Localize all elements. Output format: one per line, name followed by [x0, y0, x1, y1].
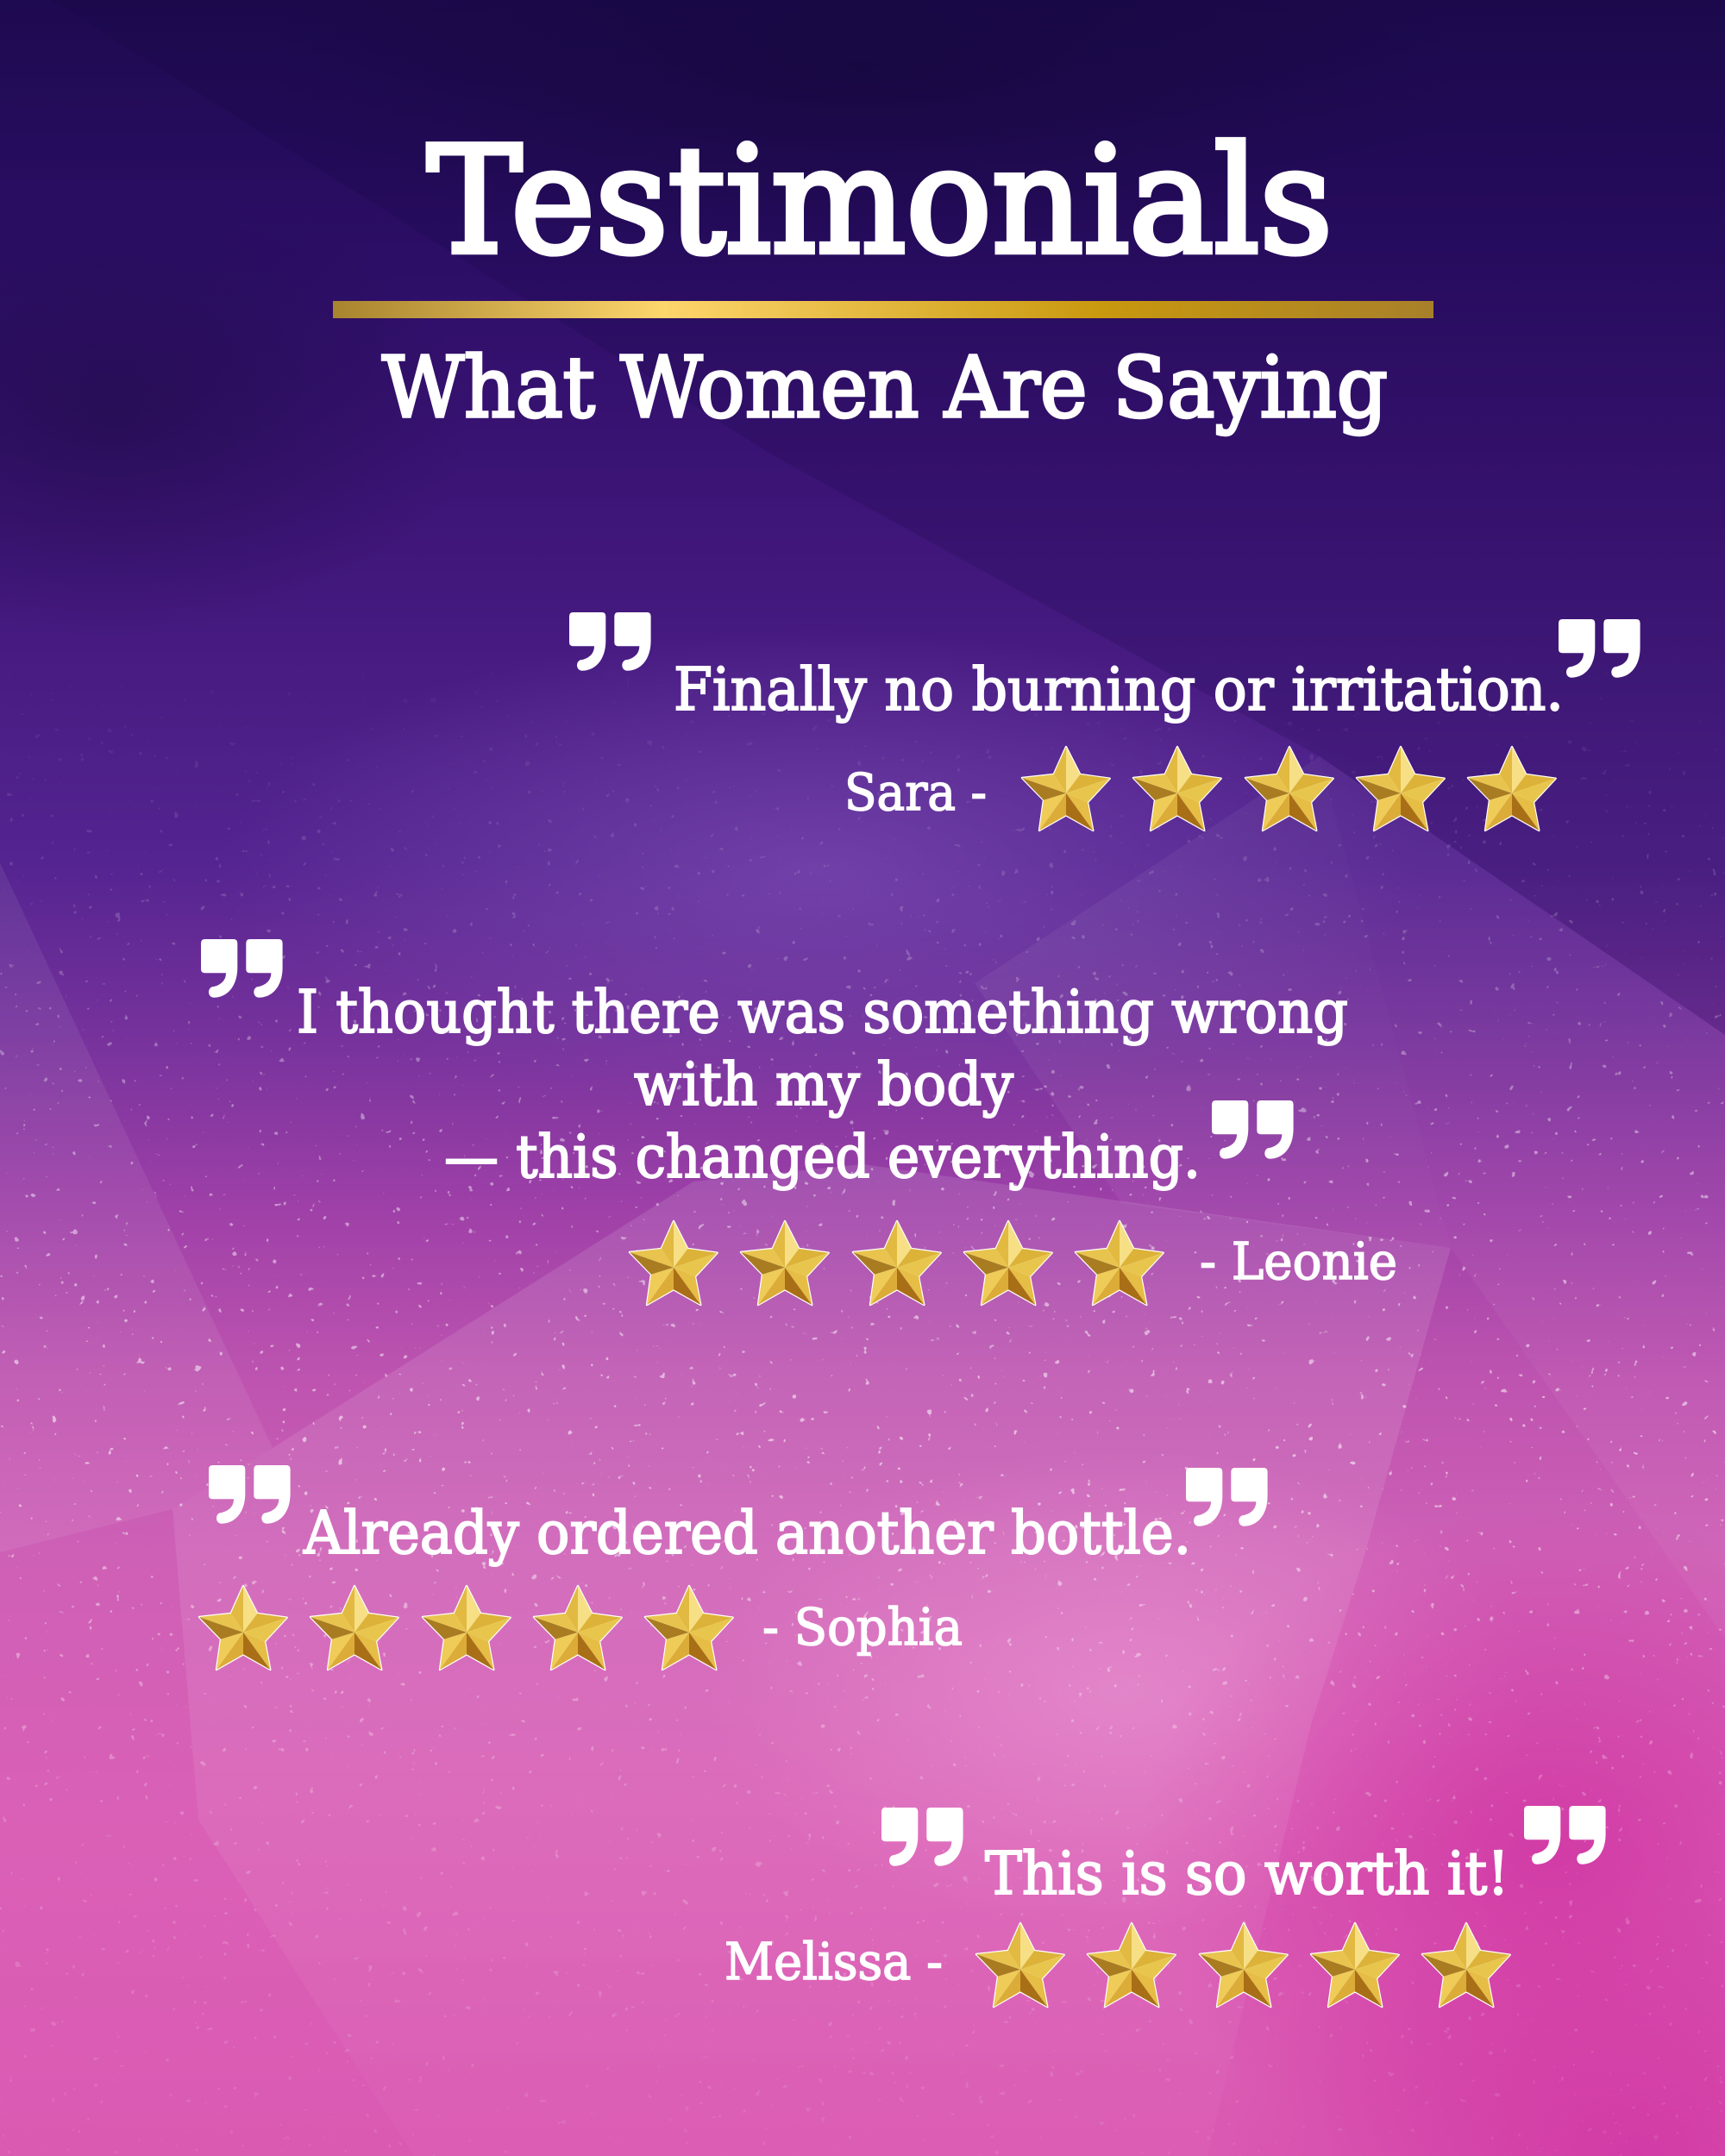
attribution: Sara -	[844, 762, 987, 822]
attribution: Melissa -	[724, 1932, 943, 1991]
icon: closing quote mark	[1524, 1806, 1606, 1865]
icon: opening quote mark	[881, 1808, 963, 1866]
icon: closing quote mark	[1186, 1468, 1268, 1526]
quote text: This is so worth it!	[985, 1840, 1509, 1908]
testimonial: Sara	[569, 612, 1640, 830]
testimonial: Leonie	[201, 939, 1397, 1305]
five star rating	[630, 1221, 1164, 1305]
icon: closing quote mark	[1212, 1100, 1294, 1159]
testimonial: Sophia	[199, 1465, 1268, 1670]
five star rating	[976, 1923, 1510, 2007]
icon: opening quote mark	[569, 612, 651, 671]
icon: opening quote mark	[209, 1465, 291, 1524]
testimonial: Melissa	[724, 1806, 1606, 2007]
attribution: - Sophia	[762, 1597, 963, 1657]
quote text: — this changed everything.	[444, 1124, 1201, 1192]
attribution: - Leonie	[1200, 1232, 1397, 1291]
gold divider bar	[333, 301, 1433, 318]
quote text: I thought there was something wrong	[297, 979, 1348, 1047]
five star rating	[199, 1586, 733, 1670]
five star rating	[1022, 747, 1556, 830]
quote text	[297, 979, 1348, 1192]
title: Testimonials	[427, 116, 1333, 287]
icon: closing quote mark	[1559, 619, 1640, 678]
quote text: Already ordered another bottle.	[303, 1500, 1191, 1568]
icon: opening quote mark	[201, 939, 283, 998]
quote text: Finally no burning or irritation.	[674, 656, 1564, 724]
quote text: with my body	[634, 1051, 1014, 1119]
subtitle: What Women Are Saying	[382, 339, 1388, 436]
